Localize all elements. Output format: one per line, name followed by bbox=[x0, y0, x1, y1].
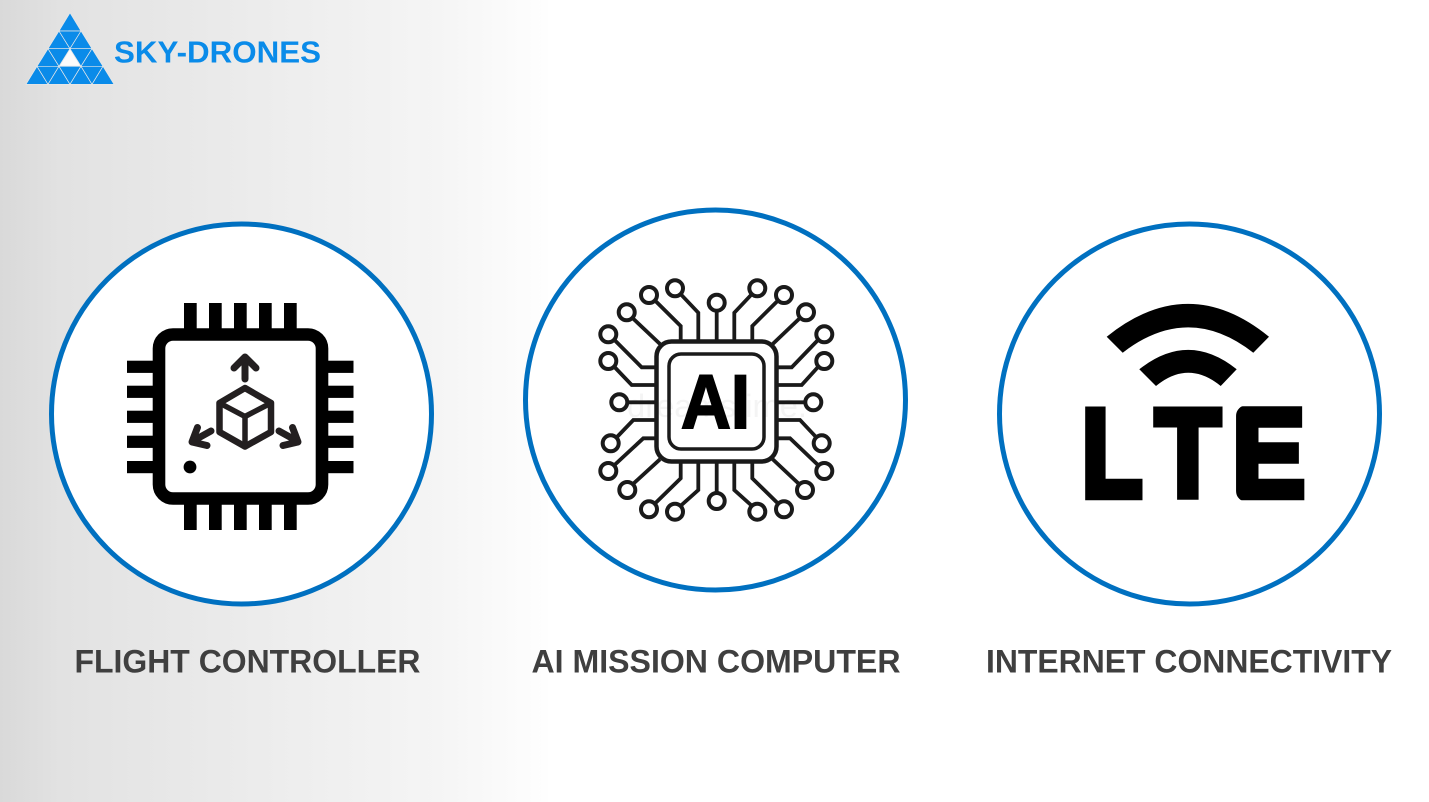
logo: Sky-Drones bbox=[26, 13, 321, 84]
logo mark: triangle bbox=[26, 13, 114, 84]
LTE letters: E bbox=[1232, 383, 1305, 523]
panel: internet connectivity bbox=[986, 224, 1392, 680]
chip body bbox=[656, 342, 776, 462]
label: flight controller: FLIGHT CONTROLLER bbox=[74, 644, 420, 680]
LTE letters: T bbox=[1155, 383, 1221, 523]
panel: AI mission computer bbox=[526, 210, 906, 680]
logo wordmark: SKY-DRONES bbox=[114, 36, 321, 70]
circle: flight controller bbox=[52, 224, 432, 604]
LTE letters: L bbox=[1082, 384, 1143, 523]
circle: internet connectivity bbox=[1000, 224, 1380, 604]
icon: AI chip bbox=[600, 280, 832, 520]
icon: AI chip: dreamstime. bbox=[627, 388, 807, 424]
wifi arcs bbox=[1107, 304, 1269, 386]
panel: flight controller bbox=[52, 224, 432, 680]
label: AI mission computer: AI MISSION COMPUTER bbox=[532, 644, 900, 680]
circuit traces bbox=[614, 294, 818, 506]
icon: cube with axis arrows bbox=[192, 357, 298, 446]
background gradient panel bbox=[0, 0, 548, 802]
label: internet connectivity: INTERNET CONNECTIVITY bbox=[986, 644, 1392, 680]
icon: LTE signal bbox=[1082, 304, 1305, 523]
circle: AI mission computer bbox=[526, 210, 906, 590]
chip label AI: AI bbox=[681, 360, 750, 445]
icon: flight controller chip bbox=[127, 303, 354, 530]
circuit nodes bbox=[600, 280, 832, 520]
LTE letters bbox=[1082, 383, 1305, 523]
